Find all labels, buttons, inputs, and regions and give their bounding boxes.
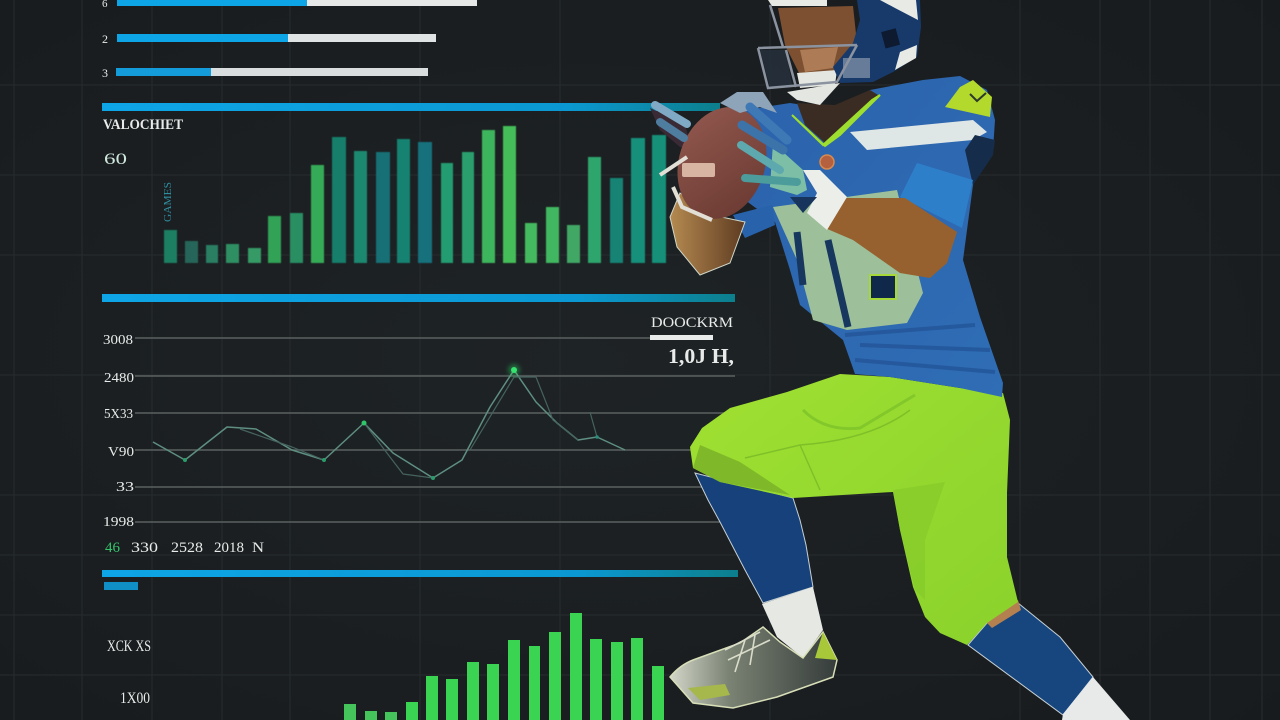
axis labels: XCK XS bbox=[107, 638, 151, 655]
face bbox=[778, 6, 857, 75]
facemask bbox=[758, 5, 857, 88]
axis value: 60 bbox=[104, 151, 127, 168]
back leg, navy bbox=[695, 473, 813, 603]
bar row 2 bbox=[102, 32, 436, 46]
crown stripes bbox=[768, 0, 918, 70]
number outlines bbox=[797, 232, 848, 327]
lower face skin bbox=[800, 47, 838, 72]
collar bbox=[792, 95, 880, 146]
section rule 2 bbox=[102, 294, 735, 302]
x axis labels: N bbox=[252, 540, 264, 556]
y axis labels: V90 bbox=[108, 445, 134, 460]
left forearm bbox=[670, 193, 745, 275]
bars bbox=[164, 126, 666, 263]
vertical axis label: GAMES bbox=[163, 182, 174, 222]
left wrist strap bbox=[660, 157, 712, 220]
bar row 2: 2 bbox=[102, 32, 108, 46]
panel: bright green bar chart bbox=[104, 582, 664, 720]
front lower leg, navy bbox=[968, 603, 1093, 715]
legend label: DOOCKRM bbox=[651, 315, 733, 331]
bar row 1 bbox=[102, 0, 477, 10]
y axis labels: 3008 bbox=[103, 333, 133, 348]
legend value: 1,0J H, bbox=[668, 344, 734, 368]
helmet bbox=[758, 0, 921, 105]
shoulder stripe bbox=[850, 120, 987, 150]
dark shoulder panel bbox=[965, 135, 995, 185]
y axis labels: 33 bbox=[116, 480, 134, 495]
ear hole bbox=[881, 28, 900, 49]
left sleeve bbox=[733, 205, 775, 238]
right arm bbox=[825, 198, 957, 278]
jersey torso bbox=[700, 76, 1003, 397]
glove right hand bbox=[720, 92, 817, 213]
panel: bar chart, teal and green bbox=[103, 117, 666, 263]
y axis labels: 5X33 bbox=[104, 407, 133, 422]
dark facemask gap bbox=[760, 50, 792, 88]
ball lace patch bbox=[682, 163, 715, 177]
y axis labels bbox=[103, 333, 134, 530]
back sock bbox=[762, 587, 823, 658]
football player bbox=[650, 0, 1130, 720]
panel: line chart bbox=[103, 315, 735, 556]
glove left hand bbox=[655, 105, 687, 138]
left hand underside bbox=[650, 108, 692, 150]
knee skin bbox=[987, 600, 1021, 628]
wrist tape bbox=[803, 170, 847, 230]
football bbox=[663, 96, 781, 230]
chin guard bbox=[787, 83, 840, 105]
data points bbox=[183, 364, 599, 480]
section rule 3 bbox=[102, 570, 738, 577]
neck bbox=[797, 90, 878, 143]
small tag bbox=[104, 582, 138, 590]
trend lines bbox=[153, 370, 625, 478]
bars bbox=[344, 613, 664, 720]
jersey badge bbox=[820, 155, 834, 169]
jersey number bbox=[773, 190, 923, 330]
panel: top progress bars bbox=[102, 0, 477, 80]
sleeve bbox=[900, 163, 973, 228]
back shoe bbox=[670, 627, 837, 708]
gridlines bbox=[135, 338, 735, 522]
y axis labels: 2480 bbox=[104, 371, 134, 386]
x axis labels bbox=[105, 540, 264, 556]
mouth guard bbox=[797, 70, 837, 88]
x axis labels: 2528 bbox=[171, 540, 203, 556]
x axis labels: 2018 bbox=[214, 540, 244, 556]
x axis labels: 330 bbox=[131, 540, 158, 556]
shell bbox=[833, 0, 921, 83]
decal bbox=[843, 58, 870, 78]
section rule 1 bbox=[102, 103, 720, 111]
shoulder patch bbox=[945, 80, 992, 117]
x axis labels: 46 bbox=[105, 540, 120, 556]
pants bbox=[690, 374, 1018, 645]
y axis labels: 1998 bbox=[103, 515, 134, 530]
jersey folds bbox=[845, 325, 995, 372]
bar row 3 bbox=[102, 66, 428, 80]
bar row 3: 3 bbox=[102, 66, 108, 80]
front sock bbox=[1062, 677, 1130, 720]
panel: bright green bar chart: 1X00 bbox=[120, 690, 150, 707]
chart title: VALOCHIET bbox=[103, 117, 183, 133]
